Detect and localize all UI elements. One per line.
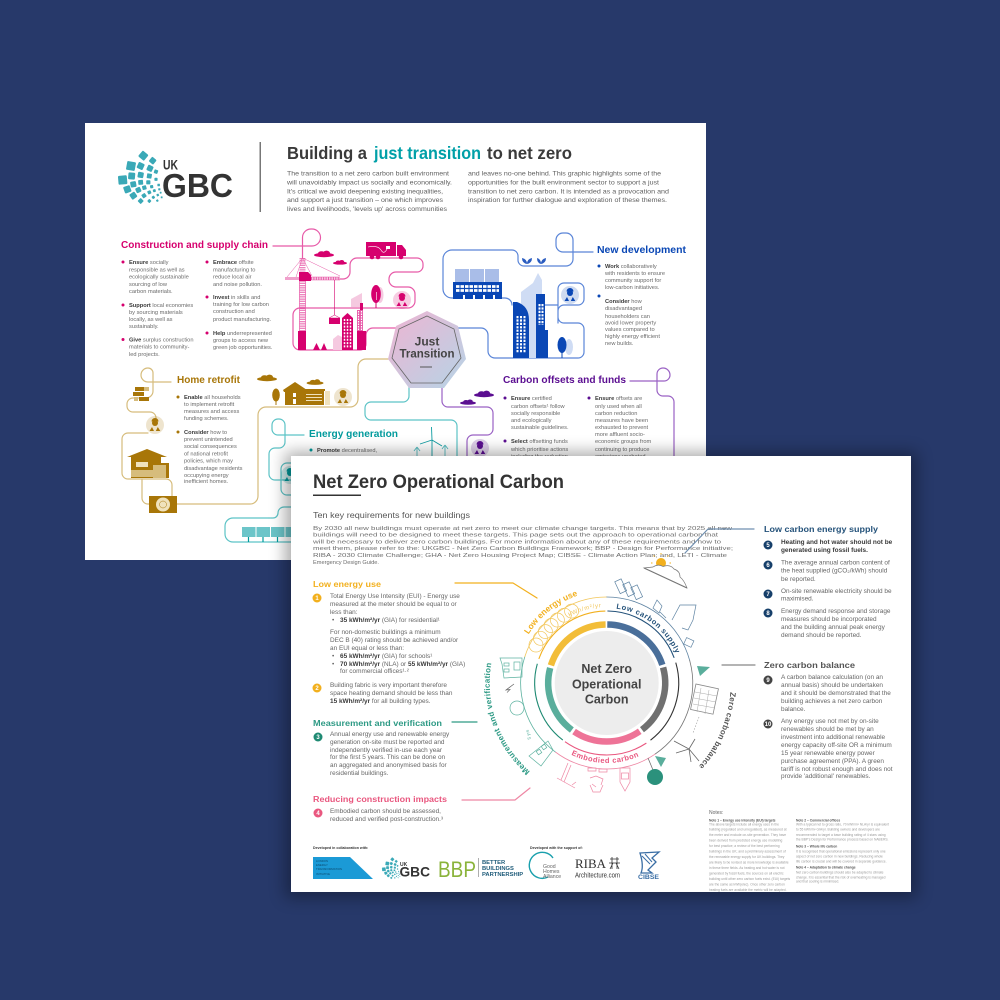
bullets: construction: and noise pollution. [213, 282, 262, 288]
icons: embodied carbon [557, 763, 630, 792]
diagram: just transition heptagon: Just [415, 334, 439, 348]
label: 5 yrs: 5 yrs [524, 729, 532, 740]
bullets: construction: reduce local air [213, 275, 252, 281]
intro text: lives and livelihoods, 'levels up' across communities [287, 206, 448, 213]
bullets: construction: construction and [213, 309, 255, 315]
title: just transition [373, 143, 481, 163]
diagram: just transition heptagon: Transition [400, 346, 454, 360]
notes [709, 810, 889, 892]
icon: person gold [146, 416, 164, 434]
centre label: Operational [572, 678, 641, 692]
bullets: offsets [504, 396, 652, 460]
note 1: generated by fossil fuels, the sources on all electric [709, 872, 784, 876]
bullets: new development: low-carbon initiatives. [605, 285, 660, 291]
text: requirements 5 to 8: maximised. [781, 596, 814, 602]
connector: blue route [443, 233, 593, 358]
badge: 4: 4 [316, 811, 320, 817]
title: Building a [287, 143, 367, 163]
text: requirement 1: an EUI equal or less than: [330, 645, 404, 652]
note 1: are the same as kWh(elec). Once other zero carbon [709, 882, 785, 886]
text: requirement 1: less than: [330, 609, 358, 616]
shadow of front sheet [285, 452, 917, 898]
bullets: home retrofit: funding schemes. [184, 416, 229, 422]
bullets: offsets: more affluent socio- [595, 432, 645, 438]
bullets: new development: avoid lower property [605, 320, 656, 326]
logo: RIBA [575, 857, 620, 880]
text: requirements 9 and 10 [781, 674, 893, 780]
intro text: It's critical we avoid deepening existing inequalities, [287, 188, 443, 196]
bullets: offsets: which prioritise actions [510, 447, 568, 453]
intro text: By 2030 all new buildings must operate at net zero to meet our climate change targets. This means that by 2025 all new [313, 526, 732, 532]
bullets: offsets: measures have been [595, 418, 648, 424]
bullets: offsets: Ensure certified [511, 396, 552, 402]
notes 2 to 4: change. It is essential that the risk of overheating is managed [796, 876, 886, 880]
heading: low energy use: Low energy use [313, 579, 381, 589]
bullets: construction: ecologically sustainable [129, 275, 189, 281]
note 1: the renewable energy supply for UK buildings. They [709, 855, 785, 859]
heading: construction: Construction and supply chain [121, 239, 268, 251]
bullets: offsets: sustainable guidelines. [511, 425, 569, 431]
bullets: construction: Ensure socially [129, 260, 169, 266]
logo: LETI: INITIATIVE [316, 872, 330, 876]
bullets: new development: highly energy efficient [605, 334, 660, 340]
bullets: offsets: Ensure offsets are [595, 396, 642, 402]
text: requirement 2: space heating demand should be less than [330, 690, 453, 697]
text: requirements 9 and 10: balance. [781, 706, 806, 713]
centre disc [555, 631, 659, 735]
bullets: new development: Consider how [605, 299, 643, 305]
text: requirements 9 and 10: energy capacity off-site OR a minimum [781, 742, 892, 749]
intro text: meet them, please refer to the: UKGBC - Net Zero Carbon Buildings Framework; BBP - Design for Performance initiative; [313, 546, 734, 552]
bullets: offsets: including the reduction [511, 454, 568, 460]
bullets: home retrofit: Enable all households [184, 395, 241, 401]
text: requirements 5 to 8: On-site renewable electricity should be [781, 588, 892, 595]
text: requirement 1: DEC B (40) rating should be achieved and/or [330, 637, 459, 644]
text: requirement 1: For non-domestic buildings a minimum [330, 629, 441, 636]
bullets: home retrofit: occupying energy [184, 473, 229, 479]
intro text: inspiration for further dialogue and exploration of these themes. [468, 197, 667, 204]
icon: person teal [281, 466, 299, 484]
text: requirement 3: for the first 5 years. This can be done on [330, 754, 446, 761]
logo: Good Homes Alliance: Good [543, 864, 556, 870]
badge: 1: 1 [315, 596, 319, 602]
bullets: construction: Give surplus construction [129, 338, 194, 344]
bullets: construction: groups to access new [213, 338, 269, 344]
bullets: new development: values compared to [605, 327, 655, 333]
panel: energy generation [225, 383, 457, 542]
bullets: new development: disadvantaged [605, 306, 642, 312]
logo: RIBA: RIBA [575, 857, 606, 871]
text: requirement 3: generation on-site must be reported and [330, 739, 445, 746]
notes 2 to 4: and that cooling is minimised. [796, 880, 839, 884]
icons: low energy insulation coil [529, 604, 579, 652]
bullets: offsets: carbon offsets¹ follow [511, 404, 566, 410]
connector: purple route [442, 368, 674, 460]
text: requirement 4: reduced and verified post-construction.³ [330, 816, 444, 823]
bullets: new development: Work collaboratively [605, 264, 657, 270]
bullets: home retrofit: policies, which may [184, 458, 233, 464]
badge: 8: 8 [766, 611, 770, 617]
panel: new development [443, 233, 686, 358]
intro text [286, 170, 669, 213]
centre label: Carbon [585, 692, 629, 706]
text: requirements 5 to 8: demand should be reported. [781, 632, 862, 639]
notes 2 to 4: Note 3 – Whole life carbon [796, 844, 837, 848]
panel: measurement and verification [313, 718, 450, 777]
text: requirements 9 and 10: renewables should be met by an [781, 726, 874, 733]
chart: net zero ring diagram [484, 553, 736, 792]
curved labels: Low energy use [524, 592, 578, 634]
text: requirements 9 and 10: investment into additional renewable [781, 734, 886, 741]
panel: reducing construction impacts [313, 794, 447, 823]
ring: thin [506, 582, 708, 784]
connector: gold route [122, 359, 392, 504]
icon: sun and cloud [644, 553, 687, 588]
diagram: just transition heptagon [388, 311, 466, 388]
note 1: Note 1 – Energy use intensity (EUI) targets [709, 818, 776, 822]
bullets: home retrofit [176, 395, 243, 485]
text: requirement 2: Building fabric is very important therefore [330, 682, 447, 689]
badge: 10: 10 [765, 722, 772, 728]
notes 2 to 4: With a typical net to gross ratio, 70 kWh/m² NLA/yr is equivalent [796, 822, 889, 826]
heading: zero carbon balance: Zero carbon balance [764, 660, 855, 670]
text: requirement 1: 70 kWh/m²/yr (NLA) or 55 kWh/m²/yr (GIA) [340, 661, 465, 668]
connector: construction route [273, 229, 423, 350]
panel: low energy use [312, 579, 465, 705]
bullets: offsets: only used when all [595, 404, 642, 410]
icons: low carbon supply [615, 579, 696, 647]
note 1 [709, 818, 791, 892]
bullets: construction: responsible as well as [129, 268, 185, 274]
bullets: offsets: continuing to produce [595, 447, 649, 453]
centre label: Net Zero [581, 662, 632, 676]
heading: measurement: Measurement and verification [313, 718, 442, 728]
note 1: in these three fields. As heating and hot water is not [709, 866, 785, 870]
bullets: construction: sourcing of low [129, 282, 168, 288]
text: requirement 1: 65 kWh/m²/yr (GIA) for schools¹ [340, 653, 432, 660]
intro text: buildings will need to be designed to meet these targets. This page sets out the approach to operational carbon that [313, 533, 719, 539]
bullets: energy generation: Promote decentralised, [317, 448, 377, 454]
text: requirements 9 and 10: provide 'additional' renewables. [781, 773, 871, 780]
text: requirements 5 to 8: Heating and hot water should not be [781, 539, 893, 546]
heading: new development: New development [597, 244, 686, 256]
text: requirements 5 to 8: be reported. [781, 576, 816, 583]
bullets: home retrofit: prevent unintended [184, 437, 233, 443]
text: requirements 9 and 10: 15 year renewable energy power [781, 750, 876, 757]
intro text: Emergency Design Guide. [313, 560, 379, 566]
icon: person gold 2 [334, 388, 352, 406]
bullets: offsets: exhausted to prevent [595, 425, 649, 431]
heading: reducing: Reducing construction impacts [313, 794, 447, 804]
centre label [572, 662, 641, 706]
notes 2 to 4: aspect of net zero carbon in new buildings. Reducing whole [796, 854, 883, 858]
text: requirement 3 [330, 731, 450, 777]
note 1: buildings in the UK; and a preliminary assessment of [709, 850, 786, 854]
icon: clouds pink [314, 251, 347, 265]
note 1: The above targets include all energy uses in the [709, 822, 779, 826]
text: requirement 3: an aggregated and anonymised basis for [330, 762, 448, 769]
logo: Good Homes Alliance: Homes [543, 869, 560, 875]
notes 2 to 4: the BBP's Design for Performance process based on NABERS. [796, 838, 889, 842]
intro text: opportunities for the built environment sector to support a just [468, 180, 659, 186]
logo: BBP: PARTNERSHIP [482, 872, 523, 878]
intro text: will unavoidably impact us socially and economically. [286, 180, 452, 186]
curved labels: Zero carbon balance [700, 692, 736, 768]
text: requirement 3: residential buildings. [330, 770, 389, 777]
text: requirement 4: Embodied carbon should be assessed, [330, 808, 441, 815]
heading: low carbon energy supply: Low carbon energy supply [764, 524, 878, 534]
text: requirements 5 to 8: Energy demand response and storage [781, 608, 891, 615]
text: requirements 9 and 10: tariff is not robust enough and does not [781, 766, 893, 773]
bullets: construction: product manufacturing. [213, 317, 272, 323]
footer: support logos: Developed with the support of: [530, 846, 583, 850]
text: requirement 1 [330, 593, 465, 675]
bullets: construction: Embrace offsite [213, 260, 254, 266]
text: requirements 5 to 8: generated using fossil fuels. [781, 547, 868, 554]
logo: BBP: BUILDINGS [482, 866, 514, 872]
text: requirements 9 and 10: A carbon balance calculation (on an [781, 674, 883, 681]
logo: BBP [438, 857, 523, 882]
logo: LETI: TRANSFORMATION [316, 867, 342, 871]
panel: zero carbon balance [764, 660, 893, 780]
intro text: transition to net zero carbon. It is intended as a provocation and [468, 188, 669, 196]
text: requirements 9 and 10: annual basis) should be undertaken [781, 682, 883, 689]
logo: LETI: LONDON [316, 859, 328, 863]
notes: Notes: [709, 810, 723, 816]
bullets: offsets: socially responsible [511, 411, 560, 417]
text: requirement 4 [330, 808, 444, 823]
notes 2 to 4: Net zero carbon buildings should also be adapted to climate [796, 870, 884, 874]
intro text: RIBA - 2030 Climate Challenge; GHA - Net Zero Housing Project Map; CIBSE - Climate Action Plan; and, LETI - Climate [313, 553, 727, 559]
panel: home retrofit [122, 359, 392, 513]
icon: city buildings [333, 293, 366, 350]
connector: teal route [225, 383, 457, 542]
bullets: new development [598, 264, 665, 347]
notes 2 to 4: to 55 kWh/m² GIA/yr. Building owners and developers are [796, 828, 880, 832]
bullets: home retrofit: social consequences [184, 444, 237, 450]
text: requirement 2: 15 kWh/m²/yr for all building types. [330, 698, 431, 705]
logo: UK GBC: GBC [162, 167, 233, 204]
bullets: construction: training for low carbon [213, 302, 269, 308]
icons: measurement [500, 658, 553, 766]
text: requirements 9 and 10: building achieves a net zero carbon [781, 698, 883, 705]
note 1: heating fuels are available the metric will be adapted. [709, 888, 787, 892]
curved labels: Measurement and verification [484, 663, 530, 776]
bullets: construction: by sourcing materials [129, 310, 183, 316]
intro text: and leaves no-one behind. This graphic highlights some of the [468, 170, 661, 178]
text: requirement 1: • [332, 617, 334, 624]
panel: Net Zero Operational Carbon sheet [291, 456, 911, 892]
subtitle: Ten key requirements for new buildings [313, 510, 470, 520]
intro text: will be necessary to deliver zero carbon buildings. For more information about any of these requirements and how to [312, 539, 721, 545]
icon: solar roof building [453, 269, 502, 299]
curved labels: Embodied carbon [572, 750, 638, 763]
text: requirements 5 to 8: and the building annual peak energy [781, 624, 886, 631]
footer: partner logos left: Developed in collaboration with: [313, 846, 368, 850]
panel: carbon offsets and funds [442, 368, 674, 460]
icon: gold tree [272, 388, 280, 405]
bullets: construction: carbon materials. [129, 289, 173, 295]
bullets: construction: Invest in skills and [213, 295, 260, 301]
icon: leaves [522, 258, 546, 264]
intro text: and support a just transition – one which improves [287, 197, 444, 204]
bullets: home retrofit: to implement retrofit [184, 402, 235, 408]
bullets: construction [122, 260, 273, 358]
heading: home retrofit: Home retrofit [177, 374, 240, 386]
notes 2 to 4: Note 2 – Commercial offices [796, 818, 840, 822]
bullets: new development: community support for [605, 278, 661, 284]
icon: towers [513, 273, 548, 358]
icon: truck [366, 242, 406, 259]
bullets: construction: locally, as well as [129, 317, 173, 323]
bullets: home retrofit: inefficient homes. [184, 479, 229, 485]
bullets: offsets: economic groups from [595, 439, 652, 445]
icon: person purple [471, 439, 489, 457]
icon: person pink [393, 291, 411, 309]
ring: outer [486, 563, 727, 803]
bullets: construction: Help underrepresented [213, 331, 272, 337]
note 1: are likely to be revised as more knowledge is available [709, 860, 789, 864]
icon: person blue [561, 286, 579, 304]
badge: 7: 7 [766, 592, 770, 598]
bullets: offsets: Select offsetting funds [511, 439, 568, 445]
ring: thick segments [525, 601, 689, 765]
notes 2 to 4: life carbon is crucial and will be covered in separate guidance. [796, 860, 887, 864]
logo: UKGBC small: UK [400, 862, 408, 868]
logo: BBP: BETTER [482, 860, 506, 866]
icon: wind turbines [414, 427, 448, 470]
logo: UK GBC: UK [163, 158, 178, 172]
bullets: construction: led projects. [129, 352, 160, 358]
text: requirements 5 to 8: The average annual carbon content of [781, 560, 890, 566]
badge: 2 [312, 684, 322, 692]
text: requirement 1: 35 kWh/m²/yr (GIA) for residential¹ [340, 617, 440, 624]
notes 2 to 4: Note 4 – Adaptation to climate change [796, 866, 856, 870]
text: requirements 9 and 10: and it should be demonstrated that the [781, 690, 891, 697]
text: requirements 5 to 8: measures should be incorporated [781, 616, 877, 623]
text: requirements 5 to 8 [781, 539, 893, 639]
logo: UKGBC small [382, 857, 430, 880]
logo: UKGBC small: GBC [400, 864, 430, 880]
text: requirement 3: Annual energy use and renewable energy [330, 731, 450, 738]
bullets: construction: sustainably. [129, 324, 159, 330]
bullets: construction: materials to community- [129, 345, 189, 351]
title: net zero: Net Zero Operational Carbon [313, 472, 564, 493]
bullets: home retrofit: Consider how to [184, 430, 227, 436]
bullets: offsets: and ecologically [511, 418, 552, 424]
logo: Good Homes Alliance [529, 852, 561, 880]
notes 2 to 4: recommended to target a base building rating of 4 stars using [796, 833, 886, 837]
bullets: offsets: emissions unabated. [595, 454, 648, 460]
logo: LETI: ENERGY [316, 863, 328, 867]
logo: BBP: BBP [438, 857, 476, 882]
footer: support logos [529, 846, 660, 881]
note 1: for best practice; a review of the best performing [709, 844, 780, 848]
title [287, 143, 572, 163]
bullets: new development: new builds. [605, 341, 634, 347]
logo: LETI [313, 857, 373, 879]
note 1: building until other zero carbon fuels exist. (EUI) targets [709, 877, 791, 881]
connectors: callout lines [452, 529, 755, 800]
icon: large house [127, 449, 169, 478]
icon: solar panels teal [242, 527, 299, 542]
curved labels [484, 592, 736, 776]
text: requirement 1: measured at the meter should be equal to or [330, 601, 458, 608]
bullets: home retrofit: measures and access [184, 409, 239, 415]
text: requirement 1: • [332, 653, 334, 660]
notes 2 to 4: It is recognised that operational emissions represent only one [796, 850, 886, 854]
bullets: home retrofit: of national retrofit [184, 452, 228, 458]
note 1: the meter and exclude on-site generation. They have [709, 833, 786, 837]
icon: crane [285, 258, 340, 350]
intro text [312, 526, 734, 566]
text: requirements 9 and 10: Any energy use not met by on-site [781, 718, 879, 725]
badge: 3: 3 [316, 735, 320, 741]
badge: 1 [312, 594, 322, 602]
badge: 5: 5 [766, 543, 770, 549]
icon: clouds gold [257, 375, 324, 385]
curved labels: kWh/m²/yr [568, 604, 601, 616]
badge: 2: 2 [315, 686, 319, 692]
bullets: new development: householders can [605, 314, 650, 320]
text: requirement 3: independently verified in-use each year [330, 747, 443, 754]
logo: UK GBC [118, 151, 233, 204]
text: requirement 1: • [332, 661, 334, 668]
icon: bricks [133, 387, 149, 401]
text: requirements 9 and 10: purchase agreement (PPA). A green [781, 758, 884, 765]
footer: partner logos left [313, 846, 523, 882]
text: requirements 5 to 8: the heat supplied (gCO₂/kWh) should [781, 568, 888, 575]
heading: energy generation: Energy generation [309, 428, 398, 440]
panel: low carbon energy supply [764, 524, 893, 639]
bullets: construction: Support local economies [129, 303, 193, 309]
bullets: home retrofit: disadvantage residents [184, 466, 243, 472]
icon: heat pump [149, 496, 177, 513]
badge: 9: 9 [766, 678, 770, 684]
intro text: The transition to a net zero carbon built environment [287, 170, 449, 178]
curved labels: Low carbon supply [616, 604, 680, 652]
icons: zero carbon balance [647, 666, 718, 785]
text: requirement 1: for commercial offices¹·² [340, 668, 410, 675]
note 1: building (regulated and unregulated), as measured at [709, 828, 787, 832]
icon: blue tree [558, 337, 573, 358]
bullets: construction: green job opportunities. [213, 345, 273, 351]
logo: RIBA: Architecture.com [575, 870, 620, 880]
bullets: new development: with residents to ensure [604, 271, 665, 277]
icon: clouds purple [460, 391, 494, 405]
notes 2 to 4 [796, 818, 889, 884]
text: requirement 1: Total Energy Use Intensity (EUI) - Energy use [330, 593, 460, 600]
text: requirement 2 [330, 682, 453, 705]
panel: Building a just transition sheet [85, 123, 706, 560]
logo: CIBSE: CIBSE [638, 874, 660, 881]
title: to net zero [487, 143, 572, 163]
panel: construction and supply chain [121, 229, 423, 358]
icon: pink tree [371, 285, 384, 308]
icon: small house [283, 382, 330, 405]
heading: carbon offsets: Carbon offsets and funds [503, 374, 626, 386]
bullets: offsets: carbon reduction [595, 411, 637, 417]
bullets: construction: manufacturing to [213, 268, 255, 274]
badge: 6: 6 [766, 563, 770, 569]
logo: Good Homes Alliance: Alliance [543, 874, 561, 880]
note 1: been derived from predicted energy use modelling [709, 838, 782, 842]
